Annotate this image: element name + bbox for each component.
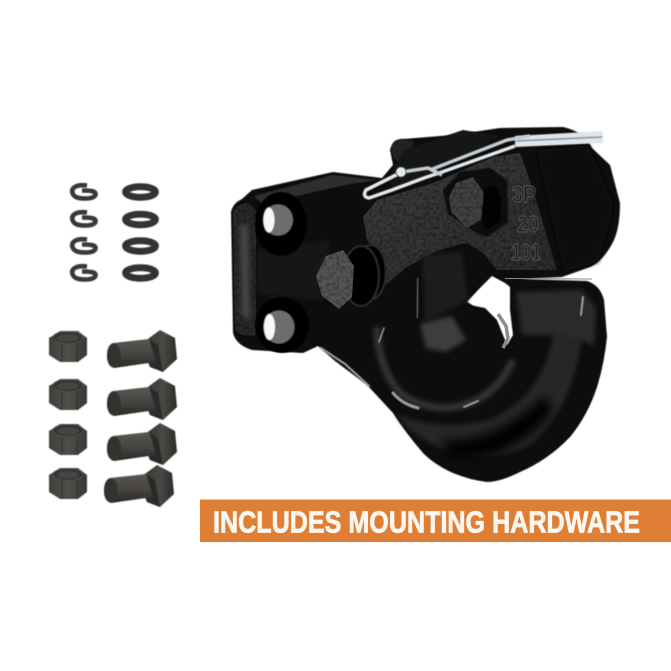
cotter pin: wires: [365, 136, 530, 198]
pivot bolt washers: [343, 245, 386, 306]
smooth outer head shadow: [537, 145, 614, 272]
mounting plate face: [233, 203, 256, 336]
plate side shine: [240, 225, 250, 320]
hook tip face: [516, 290, 596, 345]
stem edge shine: [417, 278, 418, 318]
hardware: bolts: [104, 330, 177, 507]
opening between head and hook: [465, 276, 513, 345]
head bolt socket: [443, 168, 508, 237]
hardware: flat washers: [126, 187, 156, 278]
hook inner ball: [390, 295, 494, 405]
shank stem: [422, 252, 468, 322]
cast lettering on head: 3P: [512, 181, 536, 207]
pivot bolt hexagon: [316, 250, 354, 309]
pintle hook: [231, 127, 620, 482]
lower mounting hole: [255, 297, 309, 353]
plate centre: [256, 240, 330, 300]
cast lettering on head: 20: [518, 211, 538, 237]
latch cylinder: [392, 139, 414, 162]
plate top shine: [254, 175, 378, 204]
cast lettering on head: 101: [511, 239, 541, 265]
seam between head and hook tip: [505, 278, 592, 280]
cotter pin: head: [396, 167, 406, 177]
socket slot: [482, 186, 501, 230]
latch arm: [388, 130, 500, 190]
hook throat rim: [377, 327, 513, 408]
hook shadow band: [440, 395, 552, 458]
cotter pin: flat end: [515, 131, 603, 147]
cast lettering on head: [511, 181, 541, 265]
hardware: lock washers: [72, 185, 96, 280]
hook glints: [321, 297, 583, 408]
ball shine: [420, 316, 466, 352]
head bolt hexagon: [449, 177, 484, 228]
hook silhouette: [231, 127, 620, 482]
latch pin chain: [498, 314, 508, 348]
banner: includes mounting hardware: [200, 500, 671, 542]
hardware: nuts: [49, 331, 87, 499]
upper mounting hole: [255, 192, 307, 256]
hook body sheen: [396, 330, 582, 456]
cast arm and head face: [363, 153, 557, 287]
